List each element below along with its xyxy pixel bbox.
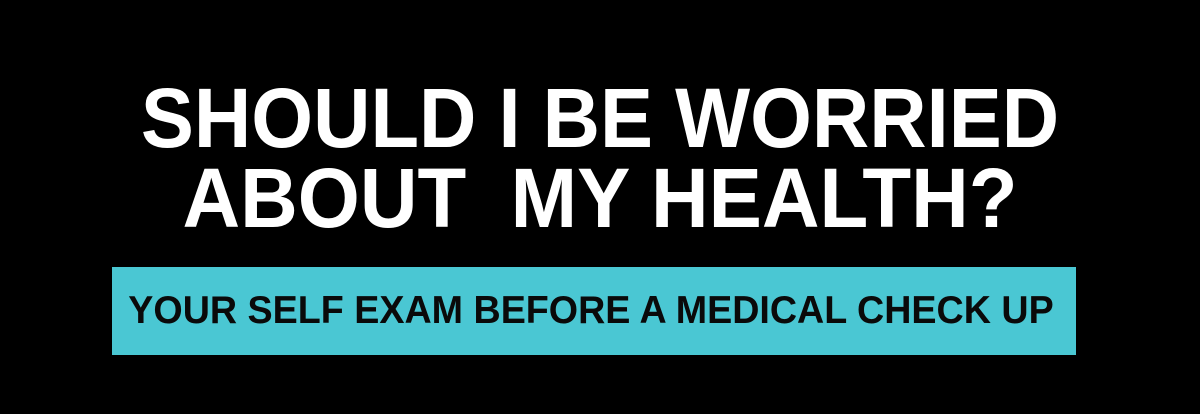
title: SHOULD I BE WORRIED [141, 71, 1059, 165]
subtitle banner [112, 267, 1076, 355]
title: ABOUT MY HEALTH? [183, 151, 1017, 245]
title [141, 71, 1059, 245]
subtitle banner: YOUR SELF EXAM BEFORE A MEDICAL CHECK UP [128, 289, 1054, 332]
